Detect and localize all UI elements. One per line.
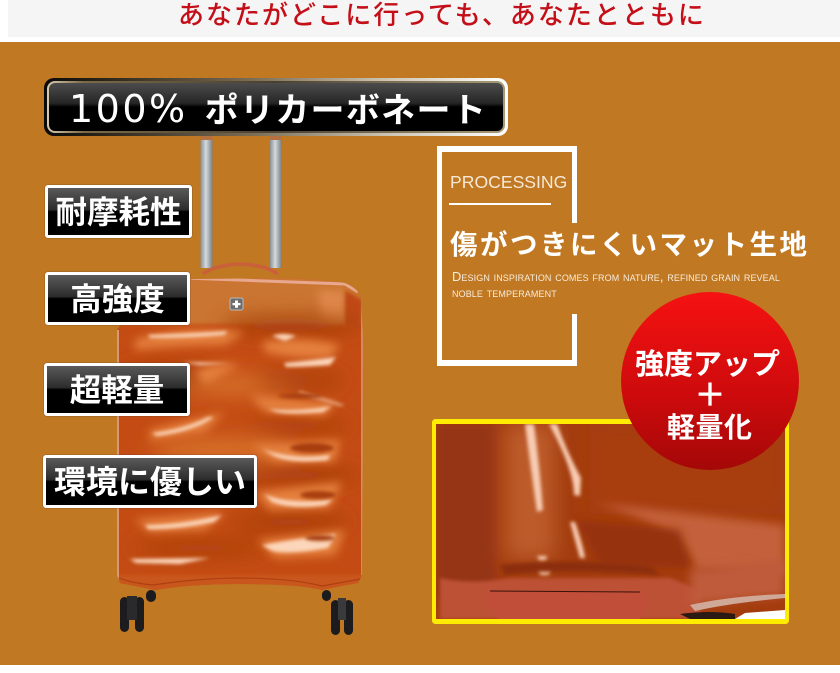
main title badge: [44, 78, 508, 136]
tag: high strength: [45, 272, 190, 325]
circle line 1: 強度アップ: [635, 349, 780, 381]
banner heading: あなたがどこに行っても、あなたとともに: [178, 0, 706, 30]
suitcase body: [110, 270, 370, 595]
tag: high strength: 高強度: [70, 281, 165, 317]
tag: abrasion resistance: 耐摩耗性: [55, 194, 182, 230]
top banner: [8, 0, 840, 37]
circle badge text: [635, 349, 780, 443]
circle line 2: 軽量化: [667, 412, 753, 443]
top carry handle: [203, 264, 278, 274]
wheels: [120, 590, 353, 635]
processing underline: [449, 203, 551, 205]
tag: abrasion resistance: [45, 185, 192, 238]
processing frame: [437, 146, 577, 366]
tag: ultra light: [44, 363, 190, 416]
tag: eco friendly: 環境に優しい: [54, 464, 246, 500]
feature description: noble temperament: [452, 285, 557, 300]
reflections: [135, 330, 345, 558]
processing label: PROCESSING: [450, 172, 567, 192]
close-up photo: [434, 420, 788, 622]
plus sign: ＋: [694, 377, 726, 413]
feature description: [452, 269, 780, 300]
red circle badge: [621, 292, 799, 470]
title text: 100% ポリカーボネート: [69, 87, 487, 131]
brand badge: [230, 298, 243, 310]
suitcase illustration: [117, 136, 799, 635]
feature heading: 傷がつきにくいマット生地: [450, 229, 809, 260]
tag: eco friendly: [43, 455, 257, 508]
frame left: [437, 146, 442, 366]
frame bottom: [437, 360, 577, 366]
tag: ultra light: 超軽量: [70, 372, 164, 408]
frame right upper: [572, 146, 577, 223]
feature description: Design inspiration comes from nature, refined grain reveal: [452, 269, 780, 284]
pull handle poles: [200, 136, 282, 268]
frame right lower: [572, 314, 577, 366]
frame top: [437, 146, 577, 152]
